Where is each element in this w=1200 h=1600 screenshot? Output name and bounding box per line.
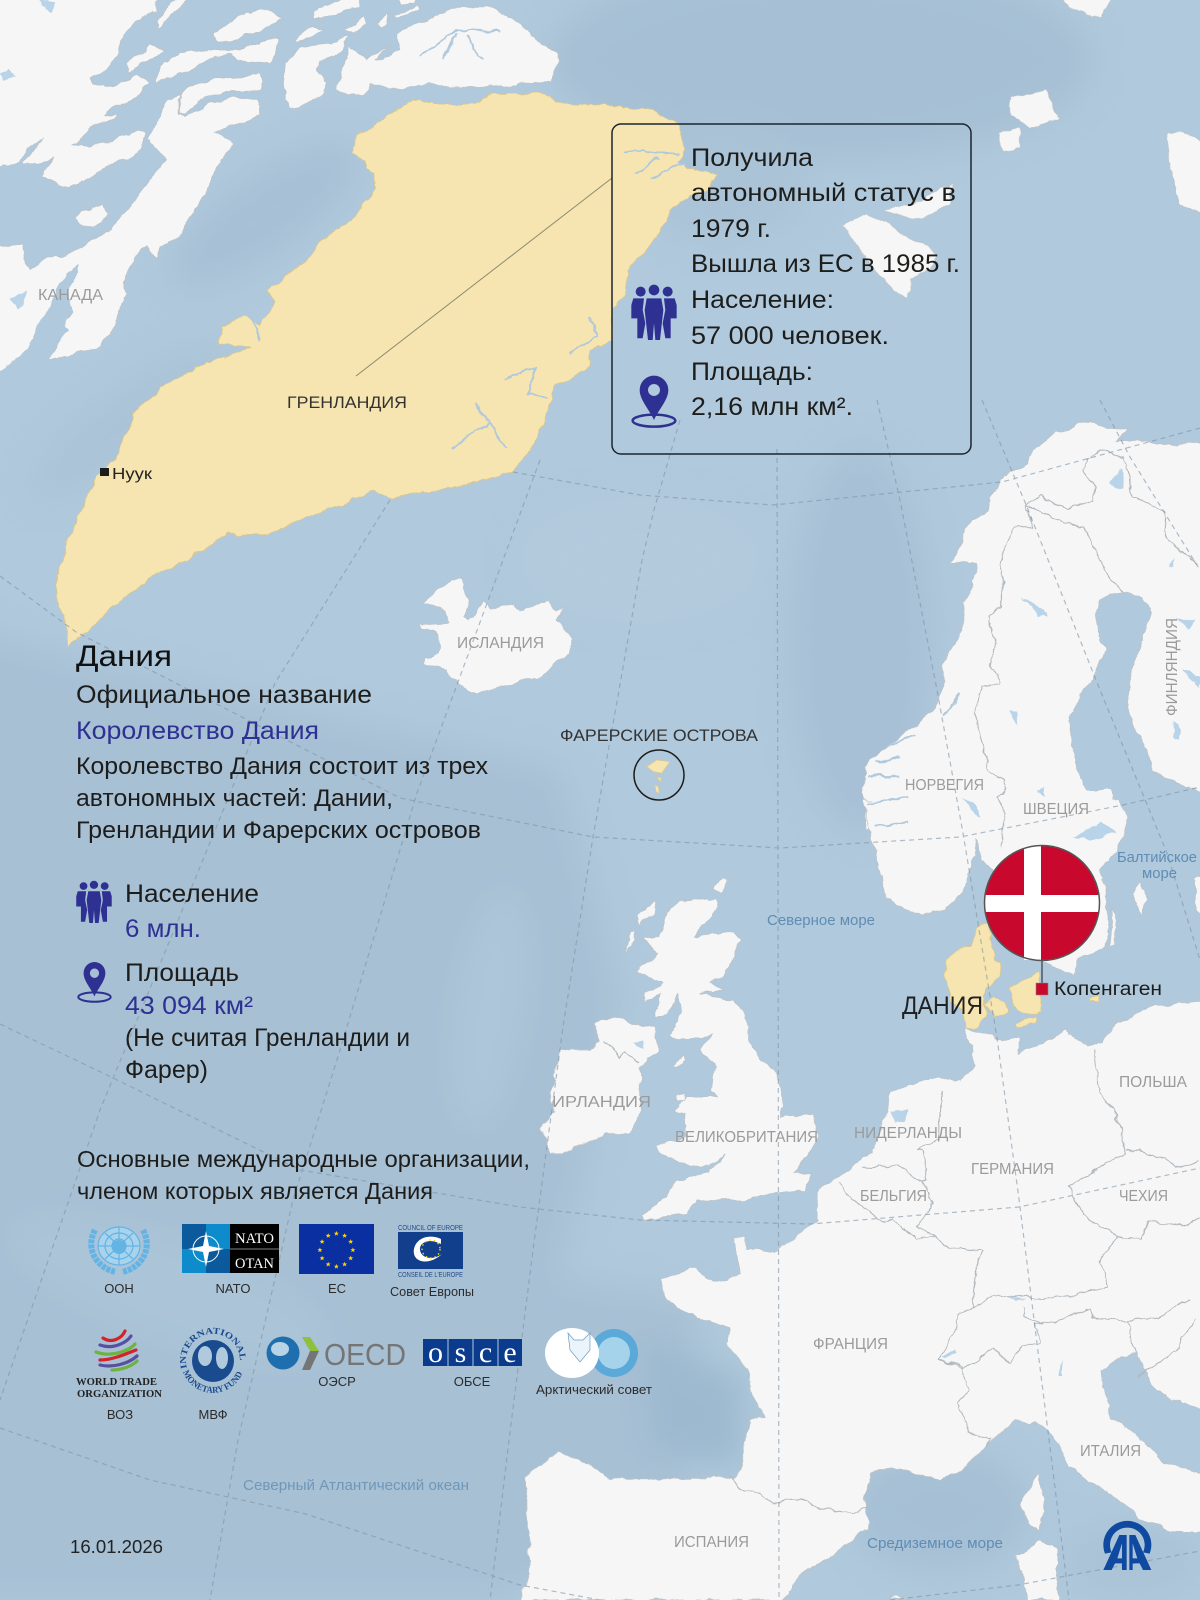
land: mainland Europe <box>520 1000 1200 1600</box>
logo: Arctic Council: Арктический совет <box>536 1382 652 1397</box>
map labels: seas: Северное море <box>767 912 875 929</box>
land: Scandinavia and Finland <box>863 423 1200 977</box>
area stat <box>125 959 410 1084</box>
description text: Гренландии и Фарерских островов <box>76 817 481 844</box>
logo: Anadolu Agency <box>1103 1521 1151 1570</box>
map labels: countries: ИТАЛИЯ <box>1080 1443 1141 1460</box>
icon: population <box>76 881 112 923</box>
callout text: 57 000 человек. <box>691 322 889 350</box>
map labels: countries <box>38 287 1187 1551</box>
map labels: countries: ЧЕХИЯ <box>1119 1188 1168 1205</box>
title: Denmark: Дания <box>76 640 172 673</box>
logo: OECD: OECD <box>324 1337 406 1372</box>
logo: Arctic Council <box>536 1328 652 1397</box>
land: Denmark <box>945 922 1098 1028</box>
land: Iceland <box>420 580 573 693</box>
map labels: countries: ФРАНЦИЯ <box>813 1336 888 1353</box>
organizations heading <box>77 1146 530 1204</box>
date: 16.01.2026 <box>70 1537 163 1557</box>
official name block: Королевство Дания <box>76 717 319 745</box>
callout text: 1979 г. <box>691 215 771 243</box>
map labels: countries: БЕЛЬГИЯ <box>860 1188 927 1205</box>
logo: OSCE: s <box>455 1336 466 1369</box>
land: Faroe Islands in circle <box>634 750 684 800</box>
label: Denmark: ДАНИЯ <box>902 992 983 1020</box>
callout panel: Greenland facts <box>612 124 971 454</box>
callout text <box>691 144 960 421</box>
logo: OSCE: e <box>503 1336 517 1369</box>
map labels: countries: ИСПАНИЯ <box>674 1534 749 1551</box>
organizations heading: Основные международные организации, <box>77 1146 530 1172</box>
callout text: Население: <box>691 286 834 314</box>
graticule <box>0 400 1200 1600</box>
logo: Council of Europe: Совет Европы <box>390 1284 474 1299</box>
map labels: seas: Средиземное море <box>867 1535 1003 1552</box>
description text: автономных частей: Дании, <box>76 785 393 812</box>
logo: WTO: ВОЗ <box>107 1407 133 1422</box>
leader line: Greenland callout <box>356 178 612 376</box>
logo: OSCE <box>423 1336 522 1389</box>
map labels: seas <box>243 849 1197 1552</box>
area stat: Фарер) <box>125 1056 208 1084</box>
logo: Council of Europe: COUNCIL OF EUROPE <box>398 1225 463 1232</box>
map labels: countries: НИДЕРЛАНДЫ <box>854 1125 962 1142</box>
icon: area pin <box>78 962 111 1002</box>
land: Greenland <box>54 92 716 648</box>
map labels: countries: ФИНЛЯНДИЯ <box>1164 618 1181 716</box>
label: Faroe Islands: ФАРЕРСКИЕ ОСТРОВА <box>560 726 759 745</box>
callout text: 2,16 млн км². <box>691 393 853 421</box>
description text <box>76 753 488 844</box>
label: Greenland: ГРЕНЛАНДИЯ <box>287 393 407 412</box>
land: Great Britain and Ireland <box>540 878 818 1220</box>
map labels: countries: НОРВЕГИЯ <box>905 777 984 794</box>
logo: IMF: MONETARY FUND <box>182 1370 242 1393</box>
map labels: seas: Балтийское <box>1117 849 1197 866</box>
logo: Council of Europe: CONSEIL DE L'EUROPE <box>398 1272 463 1279</box>
map labels: countries: ГЕРМАНИЯ <box>971 1161 1054 1178</box>
logo: WTO: WORLD TRADE <box>76 1376 157 1388</box>
population stat: Население <box>125 880 259 908</box>
logo: NATO: OTAN <box>235 1256 274 1272</box>
logo: IMF: INTERNATIONAL <box>180 1328 246 1369</box>
logo: OECD <box>266 1336 406 1389</box>
map labels: seas: море <box>1142 865 1177 882</box>
icon: people <box>631 285 677 340</box>
area stat: 43 094 км² <box>125 992 253 1020</box>
land: Canadian Arctic <box>0 0 559 420</box>
logo: UN: ООН <box>104 1281 134 1296</box>
icon: location pin <box>633 376 675 427</box>
logo: WTO <box>76 1331 162 1422</box>
map labels: countries: ШВЕЦИЯ <box>1023 801 1089 818</box>
map labels: seas: Северный Атлантический океан <box>243 1477 469 1494</box>
logo: IMF: МВФ <box>199 1407 228 1422</box>
area stat: Площадь <box>125 959 239 987</box>
map labels: countries: ПОЛЬША <box>1119 1074 1187 1091</box>
callout text: Получила <box>691 144 813 172</box>
logo: IMF <box>180 1328 246 1422</box>
land: Arctic islands (Svalbard, Franz Josef, Novaya Zemlya) <box>843 0 1200 297</box>
area stat: (Не считая Гренландии и <box>125 1024 410 1052</box>
flag of Denmark with pin <box>984 846 1100 984</box>
official name block: Официальное название <box>76 681 372 709</box>
callout text: Вышла из ЕС в 1985 г. <box>691 250 960 278</box>
map labels: countries: КАНАДА <box>38 287 103 304</box>
logo: OECD: ОЭСР <box>318 1374 356 1389</box>
capital marker: Nuuk: Нуук <box>112 466 153 483</box>
map labels: countries: ВЕЛИКОБРИТАНИЯ <box>675 1129 818 1146</box>
logo: WTO: ORGANIZATION <box>77 1388 162 1400</box>
population stat: 6 млн. <box>125 915 201 943</box>
callout text: Площадь: <box>691 358 813 386</box>
capital marker: Copenhagen: Копенгаген <box>1054 979 1162 1000</box>
callout text: автономный статус в <box>691 179 956 207</box>
map labels: countries: ИРЛАНДИЯ <box>552 1094 651 1111</box>
logo: NATO: NATO <box>235 1231 274 1247</box>
logo: Council of Europe <box>390 1225 474 1299</box>
logo: EU: ЕС <box>328 1281 346 1296</box>
population stat <box>125 880 259 943</box>
logo: NATO <box>182 1224 279 1296</box>
organizations heading: членом которых является Дания <box>77 1178 433 1204</box>
capital marker: Nuuk <box>100 466 153 483</box>
logo: OSCE: o <box>428 1336 443 1369</box>
logo: EU <box>299 1224 374 1296</box>
logo: OSCE: ОБСЕ <box>454 1374 491 1389</box>
logo: OSCE: c <box>479 1336 492 1369</box>
official name block <box>76 681 372 745</box>
map labels: countries: ИСЛАНДИЯ <box>457 635 544 652</box>
logo: NATO: NATO <box>216 1281 250 1296</box>
logo: UN <box>91 1227 147 1296</box>
description text: Королевство Дания состоит из трех <box>76 753 488 780</box>
